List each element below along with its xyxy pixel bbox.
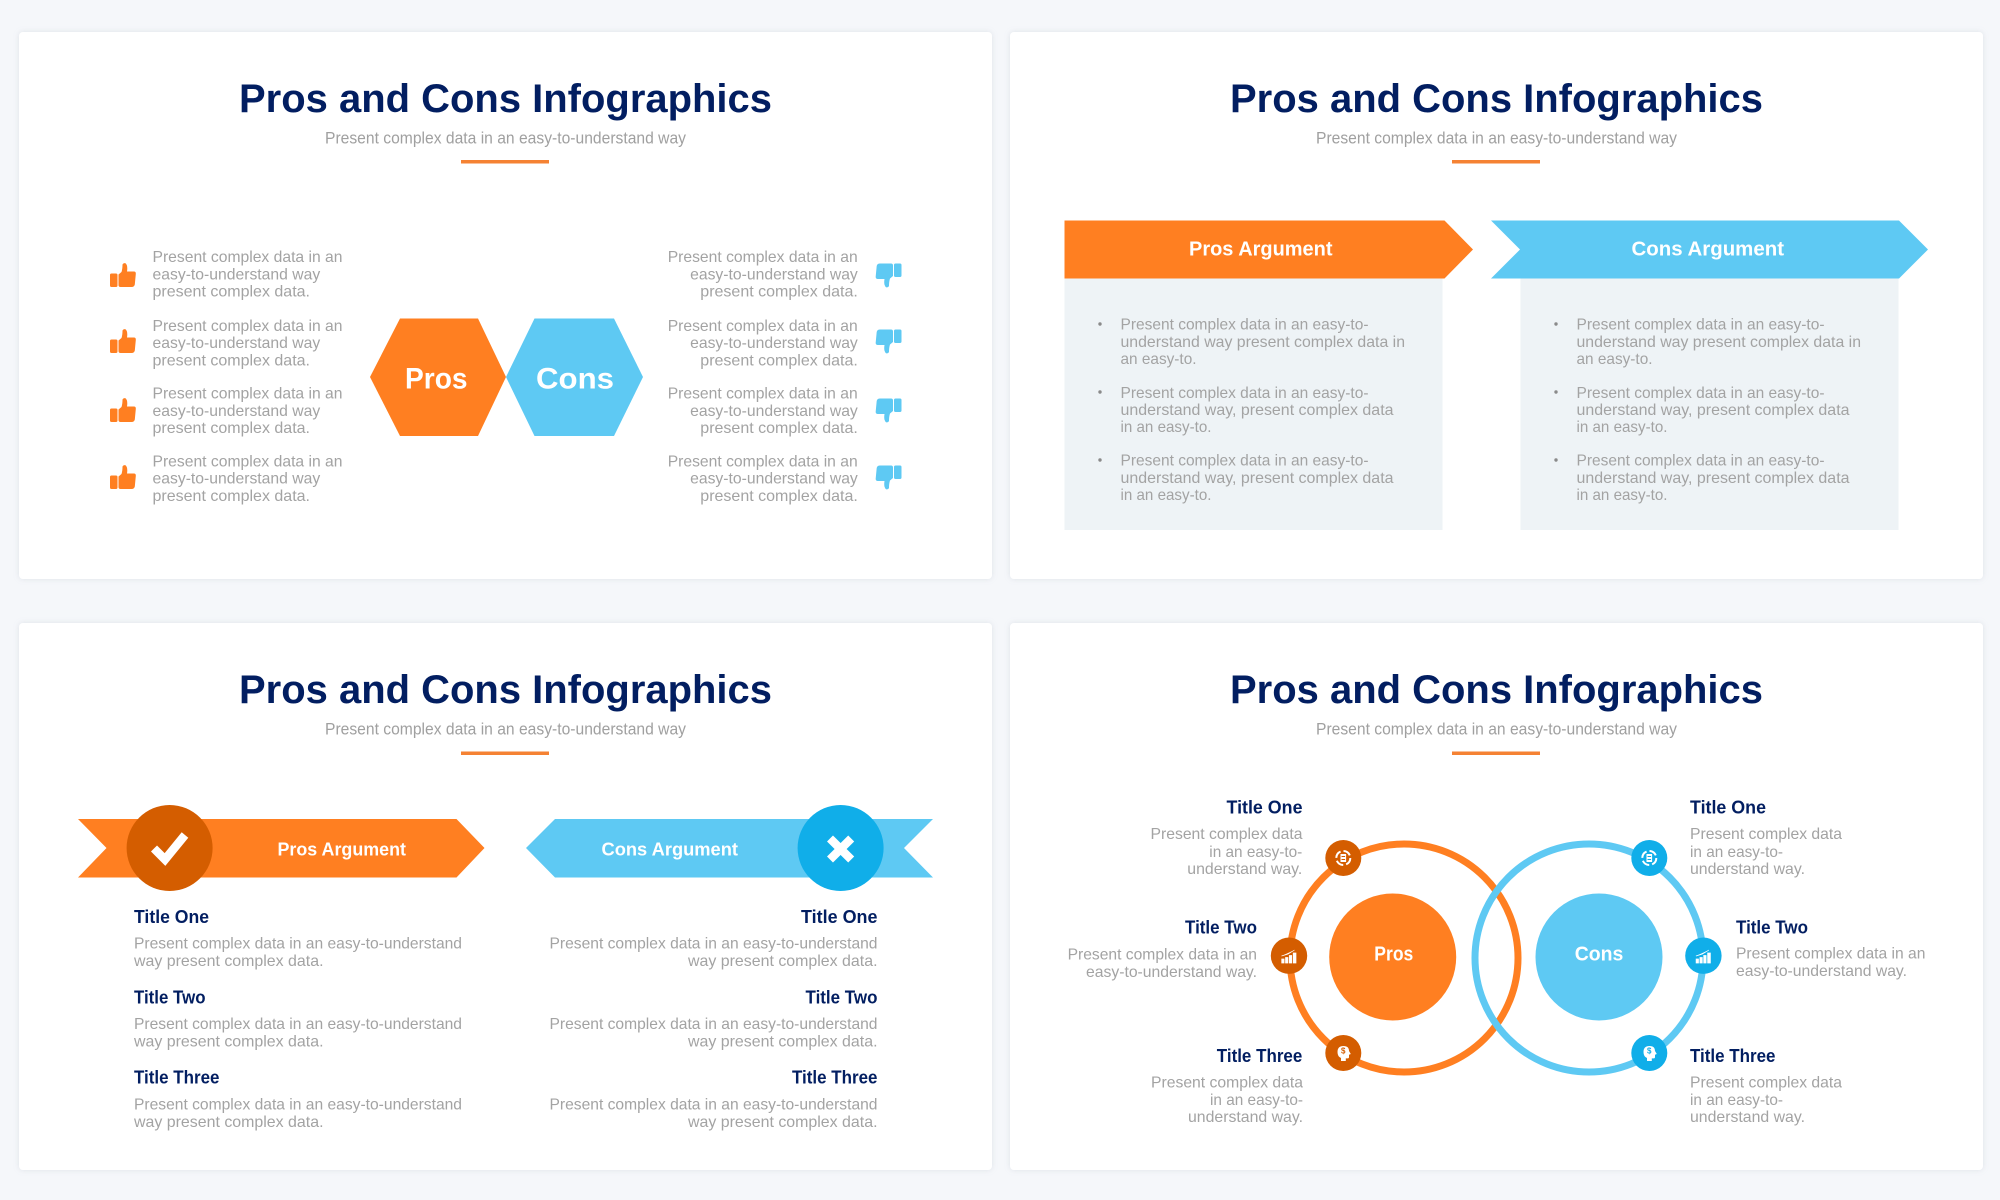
title underline (461, 752, 549, 755)
text block: pros title one: understand way. (1187, 861, 1302, 878)
title: Pros and Cons Infographics (239, 77, 772, 121)
text block: pros title three (133, 1068, 462, 1131)
icon: pros cycle node (1325, 840, 1361, 876)
subtitle: Present complex data in an easy-to-understand way (325, 130, 687, 148)
title: Pros and Cons Infographics (239, 668, 772, 712)
text block: cons title one: way present complex data. (687, 953, 878, 970)
title underline (1452, 752, 1540, 755)
text block: pros 4 (152, 454, 342, 505)
text block: cons title three: understand way. (1690, 1109, 1805, 1126)
subtitle: Present complex data in an easy-to-understand way (1316, 720, 1678, 738)
text block: pros title one: Present complex data in an easy-to-understand (134, 936, 462, 952)
text block: pros title two: Present complex data in an easy-to-understand (134, 1016, 462, 1033)
text block: cons title one: Present complex data in an easy-to-understand (550, 936, 878, 952)
bullet list: cons: an easy-to. (1576, 351, 1652, 368)
text block: cons title three (1690, 1046, 1842, 1126)
text block: cons title three: way present complex data. (687, 1114, 878, 1131)
text block: pros 4: present complex data. (152, 488, 310, 505)
text block: cons title one: in an easy-to- (1690, 844, 1783, 861)
panel: hexagon pros and cons (19, 32, 992, 579)
hexagon: cons: Cons (536, 362, 614, 396)
text block: pros title three: Present complex data (1151, 1074, 1303, 1092)
icon: thumbs down 1 (876, 264, 902, 287)
text block: cons title two: Title Two (806, 988, 878, 1008)
bullet list: pros: Present complex data in an easy-to- (1120, 452, 1368, 470)
ring: cons (1475, 844, 1703, 1072)
bullet list: cons: in an easy-to. (1576, 487, 1668, 504)
text block: pros title one (133, 907, 462, 970)
circle: pros (1329, 894, 1456, 1020)
text block: cons title one: Present complex data (1690, 826, 1842, 843)
text block: cons title three: Title Three (1690, 1046, 1776, 1066)
text block: cons 2: present complex data. (700, 352, 858, 370)
icon: cons cycle node (1631, 840, 1667, 876)
subtitle: Present complex data in an easy-to-understand way (1316, 130, 1678, 148)
text block: cons title one (1690, 798, 1842, 878)
text block: pros title one: Title One (1226, 798, 1302, 818)
text block: cons 1 (668, 249, 858, 300)
circle: cons (1536, 894, 1662, 1020)
text block: pros 2: present complex data. (152, 352, 310, 370)
bullet list: pros: an easy-to. (1120, 351, 1196, 368)
text block: pros 3: Present complex data in an (152, 386, 342, 402)
text block: cons title two: easy-to-understand way. (1736, 963, 1907, 980)
text block: cons 3: easy-to-understand way (690, 403, 858, 420)
icon: cons head node: $ (1647, 1046, 1652, 1056)
text block: cons 2 (668, 318, 858, 370)
text block: cons title three: Present complex data in an easy-to-understand (550, 1096, 878, 1114)
panel: overlapping circles (1010, 623, 1983, 1170)
icon: pros chart node (1271, 938, 1307, 974)
text block: cons title three: Present complex data (1690, 1074, 1842, 1092)
text block: cons title three (550, 1068, 878, 1131)
bullet list: pros: understand way, present complex data (1120, 470, 1394, 487)
text block: cons title two: way present complex data. (687, 1034, 878, 1050)
text block: cons 1: Present complex data in an (668, 249, 858, 266)
arrow: pros argument header: Pros Argument (1189, 238, 1333, 260)
circle: cons: Cons (1575, 944, 1623, 966)
icon: cons chart node (1685, 938, 1722, 974)
text block: pros 1: present complex data. (152, 284, 310, 300)
text block: pros title three: in an easy-to- (1210, 1092, 1303, 1109)
text block: cons title three: in an easy-to- (1690, 1092, 1783, 1109)
arrow: cons argument header (1491, 220, 1928, 278)
ribbon: pros argument (78, 805, 484, 891)
icon: thumbs down 2 (876, 330, 902, 353)
text block: cons title one: Title One (1690, 798, 1766, 818)
bullet list: pros (1098, 316, 1405, 504)
text block: pros title three: Present complex data in an easy-to-understand (134, 1096, 462, 1114)
icon: thumbs up 3 (110, 398, 136, 422)
text block: cons 2: Present complex data in an (668, 318, 858, 335)
text block: pros 3: easy-to-understand way (152, 403, 320, 420)
text block: pros title three: way present complex data. (133, 1114, 324, 1131)
text block: cons 2: easy-to-understand way (690, 335, 858, 352)
text block: pros title one (1150, 798, 1303, 878)
icon: check badge (127, 805, 213, 891)
icon: thumbs down 4 (876, 466, 902, 489)
arrow: pros argument header (1064, 220, 1473, 278)
text block: cons 4 (668, 454, 858, 505)
text block: pros title three: understand way. (1188, 1109, 1303, 1126)
hexagon: pros (370, 318, 506, 436)
text block: cons title two (1736, 918, 1925, 980)
text block: cons title one: understand way. (1690, 861, 1805, 878)
arrow: cons argument header: Cons Argument (1632, 238, 1784, 260)
title: Pros and Cons Infographics (1230, 668, 1763, 712)
bullet list: cons: Present complex data in an easy-to- (1576, 452, 1824, 470)
text block: cons 3: Present complex data in an (668, 386, 858, 402)
text block: pros title three: Title Three (1217, 1046, 1302, 1066)
text block: cons 4: Present complex data in an (668, 454, 858, 470)
ring: pros (1290, 844, 1518, 1072)
circle: pros: Pros (1374, 944, 1413, 966)
bullet list: cons: understand way, present complex data (1576, 402, 1850, 419)
bullet list: cons: understand way, present complex data (1576, 470, 1850, 487)
hexagon: cons (506, 318, 643, 436)
bullet list: pros: Present complex data in an easy-to- (1120, 316, 1368, 334)
icon: thumbs up 1 (110, 263, 136, 287)
title underline (1452, 160, 1540, 164)
text block: cons 3 (668, 386, 858, 437)
text block: pros title two: Title Two (1185, 918, 1257, 938)
text block: cons 1: present complex data. (700, 284, 858, 300)
ribbon: pros argument: Pros Argument (278, 840, 406, 860)
text block: pros title one: Title One (134, 907, 209, 927)
text block: pros title two: easy-to-understand way. (1086, 964, 1257, 981)
icon: thumbs up 4 (110, 465, 136, 489)
bullet list: pros: understand way, present complex data (1120, 402, 1394, 419)
hexagon: pros: Pros (405, 362, 468, 396)
text block: cons title one: Title One (801, 907, 878, 927)
text block: cons title two: Title Two (1736, 918, 1808, 938)
panel: argument columns (1010, 32, 1983, 579)
bullet list: pros: in an easy-to. (1120, 419, 1212, 436)
text block: pros 1: easy-to-understand way (152, 266, 320, 284)
text block: pros 2: Present complex data in an (152, 318, 342, 335)
text block: pros 3: present complex data. (152, 420, 310, 437)
text block: pros 4: Present complex data in an (152, 454, 342, 470)
bullet list: cons: Present complex data in an easy-to- (1576, 316, 1824, 334)
text block: pros title two: Present complex data in an (1068, 946, 1257, 964)
text block: cons title three: Title Three (792, 1068, 878, 1088)
icon: pros head node (1325, 1035, 1361, 1071)
text block: cons title two: Present complex data in an easy-to-understand (550, 1016, 878, 1033)
ribbon: cons argument (526, 805, 933, 891)
bullet list: cons: understand way present complex data in (1576, 334, 1861, 351)
icon: cons head node (1631, 1035, 1667, 1071)
title underline (461, 160, 549, 164)
text block: pros 3 (152, 386, 342, 437)
text block: pros title three: Title Three (134, 1068, 220, 1088)
text block: pros title one: way present complex data. (133, 953, 324, 970)
icon: pros head node: $ (1341, 1046, 1346, 1056)
ribbon: cons argument: Cons Argument (602, 840, 738, 860)
text block: pros title three (1151, 1046, 1303, 1126)
column: cons argument (1491, 220, 1928, 530)
text block: cons 3: present complex data. (700, 420, 858, 437)
bullet list: pros: Present complex data in an easy-to- (1120, 385, 1368, 402)
text block: cons 4: easy-to-understand way (690, 470, 858, 488)
text block: pros title two (1068, 918, 1257, 981)
icon: thumbs up 2 (110, 329, 136, 353)
bullet list: cons: Present complex data in an easy-to- (1576, 385, 1824, 402)
panel: ribbons (19, 623, 992, 1170)
text block: pros 1 (152, 249, 342, 300)
text block: pros 4: easy-to-understand way (152, 470, 320, 488)
text block: pros title two (133, 988, 462, 1050)
bullet list: cons (1554, 316, 1861, 504)
icon: cross badge (798, 805, 884, 891)
text block: pros title two: Title Two (134, 988, 206, 1008)
text block: pros 1: Present complex data in an (152, 249, 342, 266)
text block: cons title two: Present complex data in an (1736, 946, 1925, 963)
text block: pros title two: way present complex data. (133, 1034, 324, 1050)
text block: cons 1: easy-to-understand way (690, 266, 858, 284)
text block: cons title two (550, 988, 878, 1050)
icon: thumbs down 3 (876, 398, 902, 422)
text block: cons 4: present complex data. (700, 488, 858, 505)
text block: cons title one (550, 907, 878, 970)
subtitle: Present complex data in an easy-to-understand way (325, 720, 687, 738)
text block: pros title one: in an easy-to- (1209, 844, 1302, 861)
text block: pros 2 (152, 318, 342, 370)
column: pros argument (1064, 220, 1473, 530)
text block: pros title one: Present complex data (1150, 826, 1303, 843)
text block: pros 2: easy-to-understand way (152, 335, 320, 352)
bullet list: pros: understand way present complex data in (1120, 334, 1405, 351)
bullet list: cons: in an easy-to. (1576, 419, 1668, 436)
title: Pros and Cons Infographics (1230, 77, 1763, 121)
bullet list: pros: in an easy-to. (1120, 487, 1212, 504)
